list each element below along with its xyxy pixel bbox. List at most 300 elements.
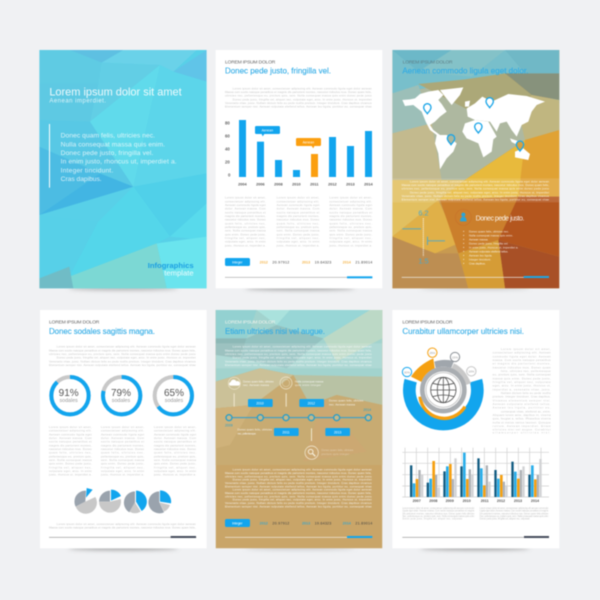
callout: blue: Aenean [262, 128, 273, 132]
three column text: fringilla vel, aliquet nec, [225, 236, 266, 240]
year boxes: 2010 [256, 401, 264, 405]
intro text: Donec pede justo, fringilla vel, aliquet nec, vulputate eget, arcu. In enim justo, rhoncus ut, imperdiet [410, 190, 549, 194]
three column text: sem. Nulla consequat massa [49, 458, 92, 462]
three column text: Aenean commodo ligula eget [277, 203, 320, 207]
three column text: Aenean commodo ligula eget [225, 203, 266, 207]
body text: ultricies nec, pellentesque eu, pretium quis, sem. Nulla consequat massa quis enim donec pede justo [225, 494, 372, 498]
bullet list: Donec quam felis, ultricies nec. [469, 229, 509, 233]
intro text: Venenatis vitae, justo. Nullam dictum felis eu pede mollis pretium. Integer tincidunt. Cras dapibus vivamus [225, 101, 372, 105]
pie 3 [124, 491, 147, 513]
ring: 91%: sodales [59, 398, 78, 404]
intro text: ultricies nec, pellentesque eu, pretium quis, sem. Nulla consequat massa quis enim donec pede justo [225, 94, 372, 98]
timeline captions [237, 379, 364, 456]
body text: Elementum semper nisi. Aenean vulputate eleifend tellus. Aenean leo ligula, porttitor eu, consequat vitae [225, 484, 372, 488]
three column text: Aenean commodo ligula eget [154, 432, 196, 436]
year boxes: 2013 [334, 430, 342, 434]
panel: donut and grouped bars page [392, 310, 559, 550]
three column text: nascetur ridiculus mus. Donec [154, 447, 197, 451]
side text column: Vivamus elementum semper nisi. [493, 398, 551, 402]
three column text: sem. Nulla consequat massa [154, 458, 196, 462]
footer rule [402, 536, 549, 538]
year labels: 2011 [481, 499, 489, 503]
three column text: magnis dis parturient montes, [277, 214, 320, 218]
three column text: sociis natoque penatibus et [225, 210, 266, 214]
bullet list: Aenean massa. [469, 237, 489, 241]
footer rule [49, 536, 196, 538]
footer rule [225, 276, 372, 278]
footer rule [402, 276, 549, 278]
stats row: 20.97912 [272, 522, 289, 526]
side text column: ullamcorper ultricies nisi. [493, 430, 551, 434]
ring: 79% [103, 377, 140, 414]
timeline captions: Donec quam felis, ultricies [243, 379, 274, 383]
page title: Curabitur ullamcorper ultricies nisi. [402, 327, 524, 336]
side text column: Lorem ipsum dolor sit amet, [501, 347, 551, 351]
three column text: sociis natoque penatibus et [49, 440, 92, 444]
footnote text [49, 522, 196, 530]
three column text: nascetur ridiculus mus. Donec [277, 218, 320, 222]
scale gauge: 6.2 [418, 209, 429, 218]
bubble labels [402, 348, 476, 377]
three column text: consectetuer adipiscing elit. [49, 429, 92, 433]
stats row: 2012 [260, 522, 268, 526]
three column text: Lorem ipsum dolor sit amet, [154, 425, 196, 429]
three column text: pellentesque eu, pretium quis, [329, 225, 372, 229]
icon: target [280, 377, 292, 389]
x axis years: 2008 [274, 182, 283, 186]
side text column: consectetuer adipiscing elit. Aenean [493, 351, 551, 355]
ring: 65% [155, 377, 192, 414]
three column text: pellentesque eu, pretium quis, [225, 225, 266, 229]
x axis years: 2004 [238, 182, 247, 186]
three column text: fringilla vel, aliquet nec, [277, 236, 320, 240]
intro text: Venenatis vitae, justo. Nullam dictum felis eu pede mollis pretium. Integer tincidunt. Cras dapibus vivamus [402, 194, 550, 198]
callout: orange: Aenean [303, 140, 314, 144]
intro text: ultricies nec, pellentesque eu, pretium quis, sem. Nulla consequat massa quis enim donec pede justo [225, 352, 372, 356]
panel: timeline page [216, 310, 382, 550]
panel: progress rings page [40, 310, 207, 550]
page title: Aenean commodo ligula eget dolor. [402, 67, 528, 76]
body text [225, 468, 372, 508]
bubble labels: 30% [404, 370, 410, 374]
y axis labels: 60 [225, 133, 230, 138]
side text column: pretium. Integer tincidunt. Cras dapibus. [493, 395, 551, 399]
stats row: 19.64323 [315, 261, 331, 265]
three column text: quis enim. Donec pede justo, [101, 462, 144, 466]
footnote text: Lorem ipsum dolor sit amet, consectetuer adipiscing elit. Aenean commodo ligula eget dolor aenean [57, 522, 196, 526]
three column text: magnis dis parturient montes, [49, 443, 92, 447]
three column text: Lorem ipsum dolor sit amet, [225, 196, 266, 200]
year boxes [248, 399, 350, 436]
stats row [225, 258, 372, 266]
bar chart [225, 120, 373, 186]
grouped bar chart [402, 448, 549, 503]
three column text: vulputate eget, arcu. In enim [154, 469, 197, 473]
x axis years: 2012 [328, 182, 337, 186]
three column text [224, 196, 373, 247]
stats row: 2012 [260, 261, 268, 265]
side text column: et magnis dis parturient montes, [493, 362, 551, 366]
cover list: Nulla consequat massa quis enim. [61, 141, 165, 148]
intro text: Lorem ipsum dolor sit amet, consectetuer adipiscing elit. Aenean commodo ligula eget dolor aenean [57, 345, 196, 349]
bars [239, 120, 372, 177]
three column text: quis enim. Donec pede justo, [154, 462, 196, 466]
x axis years: 2013 [346, 182, 355, 186]
side text column: nascetur ridiculus mus. Donec quam [493, 365, 551, 369]
three column text: quam felis, ultricies nec, [101, 451, 144, 455]
bullet list: Integer tincidunt. [469, 257, 491, 261]
navy series [410, 458, 531, 497]
intro text [225, 345, 372, 367]
three column text: dolor. Aenean massa. Cum [329, 207, 373, 211]
intro text: Massa cum sociis natoque penatibus et magnis dis parturient montes, nascetur ridiculus mus. Donec quam felis, [402, 183, 549, 187]
cover brand label: Infographics [148, 261, 194, 270]
three column text: consectetuer adipiscing elit. [154, 429, 196, 433]
body text: Elementum semper nisi. Aenean vulputate eleifend tellus. Aenean leo ligula, porttitor eu, consequat vitae [225, 504, 372, 508]
end years: 2014 [363, 408, 371, 412]
side text column: felis, ultricies nec, pellentesque [501, 369, 551, 373]
timeline captions: nec. Aenean massa [243, 383, 269, 387]
stats row: 21.89014 [355, 261, 372, 265]
three column text: nascetur ridiculus mus. Donec [101, 447, 145, 451]
three column text: consectetuer adipiscing elit. [329, 199, 372, 203]
bubble labels: 15% [452, 355, 458, 359]
x axis years [238, 182, 373, 186]
light grey series [421, 458, 542, 497]
donut chart [402, 348, 477, 424]
side text column: Aenean vulputate eleifend tellus. [493, 402, 551, 406]
bubble labels: 10% [468, 370, 475, 374]
three column text: Lorem ipsum dolor sit amet, [277, 196, 320, 200]
stats row: 2014 [343, 261, 352, 265]
cover subtitle: Aenean imperdiet. [49, 99, 106, 105]
x axis years: 2010 [292, 182, 301, 186]
body text: Massa cum sociis natoque penatibus et magnis dis parturient montes, nascetur ridiculus mus. Donec quam felis, [225, 491, 372, 495]
three column text: vulputate eget, arcu. In enim [49, 469, 92, 473]
polygon background [39, 50, 207, 288]
three column text: Aenean commodo ligula eget [101, 432, 144, 436]
stats row: Integer [232, 521, 243, 525]
y axis labels: 0 [228, 172, 231, 177]
grey series [418, 465, 539, 497]
pie 4 [148, 490, 171, 513]
cover brand label [148, 261, 194, 278]
three column text: justo, rhoncus ut, imperdiet a. [48, 473, 92, 477]
year labels: 2010 [463, 499, 471, 503]
timeline captions: Nulla consequat massa [295, 379, 324, 383]
intro text: Lorem ipsum dolor sit amet, consectetuer adipiscing elit. Aenean commodo ligula eget dolor aenean [233, 86, 372, 90]
timeline captions: quis enim integer [295, 383, 321, 387]
intro text: Massa cum sociis natoque penatibus et magnis dis parturient montes, nascetur ridiculus mus. Donec quam felis, [225, 90, 372, 94]
y axis labels: 20 [225, 159, 230, 164]
three column text: consectetuer adipiscing elit. [277, 199, 320, 203]
x axis years: 2014 [364, 182, 373, 186]
body text: Venenatis vitae, justo. Nullam dictum felis eu pede mollis pretium. Integer tincidunt. Cras dapibus vivamus [225, 501, 372, 505]
year labels: 2014 [531, 499, 540, 503]
ring: 79%: sodales [112, 398, 131, 404]
three column text: quis enim. Donec pede justo, [49, 462, 92, 466]
intro text: Elementum semper nisi. Aenean vulputate eleifend tellus. Aenean leo ligula, porttitor eu, consequat vitae [225, 105, 372, 109]
polygon background [216, 310, 382, 548]
three column text: pellentesque eu, pretium quis, [277, 225, 320, 229]
page title: Donec sodales sagittis magna. [49, 327, 155, 336]
end years: 2009 [225, 423, 233, 427]
three column text: nascetur ridiculus mus. Donec [329, 218, 373, 222]
footnote columns: Donec pede justo, fringilla vel, aliquet nec, vulputate [402, 518, 463, 521]
year labels: 2008 [429, 499, 437, 503]
intro text: Venenatis vitae, justo. Nullam dictum felis eu pede mollis pretium. Integer tincidunt. Cras dapibus vivamus [49, 359, 196, 363]
three column text: vulputate eget, arcu. In enim [225, 240, 266, 244]
timeline captions: pretium quis integer [321, 452, 349, 456]
body text: Donec pede justo, fringilla vel, aliquet nec, vulputate eget, arcu. In enim justo, rhoncus ut, imperdiet [233, 478, 372, 482]
callout: orange [296, 138, 321, 148]
year labels: 2009 [446, 499, 454, 503]
side text column: nulla ut metus varius laoreet. Quisque [493, 420, 551, 424]
cover list: Cras dapibus. [61, 176, 102, 183]
three column text: Lorem ipsum dolor sit amet, [329, 196, 372, 200]
end years [225, 408, 371, 427]
intro text: Massa cum sociis natoque penatibus et magnis dis parturient montes, nascetur ridiculus mus. Donec quam felis, [49, 348, 196, 352]
callout: blue [255, 126, 280, 136]
three column text: magnis dis parturient montes, [225, 214, 266, 218]
cover list: In enim justo, rhoncus ut, imperdiet a. [61, 159, 177, 166]
intro text: Donec pede justo, fringilla vel, aliquet nec, vulputate eget, arcu. In enim justo, rhoncus ut, imperdiet [233, 97, 372, 101]
side text column: massa. Cum sociis natoque penatibus [493, 358, 551, 362]
side text column: Nullam dictum felis eu pede mollis [501, 391, 551, 395]
polygon background [392, 50, 559, 288]
three column text: sociis natoque penatibus et [101, 440, 144, 444]
intro text: ultricies nec, pellentesque eu, pretium quis, sem. Nulla consequat massa quis enim donec pede justo [402, 187, 549, 191]
three column text: justo, rhoncus ut, imperdiet a. [224, 243, 266, 247]
panel: world map page [392, 50, 559, 290]
three column text: magnis dis parturient montes, [101, 443, 144, 447]
three column text: pellentesque eu, pretium quis, [154, 454, 196, 458]
three column text: quis enim. Donec pede justo, [225, 232, 266, 236]
footnote columns: Lorem ipsum dolor sit amet, consectetuer adipiscing elit aenean commodo [402, 507, 475, 510]
timeline captions: nec, pellentesque [237, 431, 256, 435]
three column text: dolor. Aenean massa. Cum [225, 207, 266, 211]
side text column: quis, feugiat a, tellus. Phasellus viverra [493, 417, 551, 421]
intro text: Elementum semper nisi. Aenean vulputate eleifend tellus. Aenean leo ligula, porttitor eu, consequat vitae [402, 198, 549, 202]
side text column: consequat vitae, eleifend ac, enim. [501, 409, 551, 413]
three column text: fringilla vel, aliquet nec, [154, 465, 196, 469]
icon: globe [431, 377, 456, 403]
footnote columns: Ligula eget dolor. Aenean massa. Cum sociis natoque penatibus et magnis [480, 510, 549, 513]
body text: Massa cum sociis natoque penatibus et magnis dis parturient montes, nascetur ridiculus mus. Donec quam felis, [225, 471, 372, 475]
three column text: sem. Nulla consequat massa [225, 229, 266, 233]
three column text: quis enim. Donec pede justo, [329, 232, 372, 236]
icon: person [455, 209, 471, 225]
footnote columns: Dis parturient montes, nascetur ridiculus mus. Donec quam felis ultricies [480, 512, 549, 515]
stats row: 2014 [343, 522, 352, 526]
side text column: Aenean leo ligula, porttitor eu, [493, 406, 551, 410]
timeline nodes [226, 415, 371, 421]
three column text: magnis dis parturient montes, [154, 443, 196, 447]
cover brand label: template [164, 269, 194, 278]
y axis labels: 40 [225, 146, 230, 151]
page header: LOREM IPSUM DOLOR [402, 319, 453, 325]
footnote columns: Donec pede justo, fringilla vel, aliquet nec, vulputate [480, 518, 530, 521]
ring: 91% [51, 377, 89, 414]
scale gauge [402, 209, 445, 265]
pie 1 [74, 488, 97, 514]
icon: magnifier [305, 446, 318, 459]
three column text: dolor. Aenean massa. Cum [277, 207, 320, 211]
side text column: eget, arcu. In enim justo, rhoncus ut, [493, 384, 551, 388]
intro text: Venenatis vitae, justo. Nullam dictum felis eu pede mollis pretium. Integer tincidunt. Cras dapibus vivamus [225, 359, 372, 363]
cover list: Integer tincidunt. [61, 167, 113, 174]
intro text: Donec pede justo, fringilla vel, aliquet nec, vulputate eget, arcu. In enim justo, rhoncus ut, imperdiet [57, 356, 196, 360]
year boxes: 2012 [308, 401, 315, 405]
page header: LOREM IPSUM DOLOR [225, 59, 276, 65]
intro text: Elementum semper nisi. Aenean vulputate eleifend tellus. Aenean leo ligula, porttitor eu, consequat vitae [49, 363, 196, 367]
stats row: 2013 [302, 261, 310, 265]
continents [402, 87, 545, 169]
bullet list: Nulla consequat massa quis enim. [469, 233, 513, 237]
footnote columns: Lorem ipsum dolor sit amet, consectetuer adipiscing elit aenean commodo [480, 507, 549, 510]
stats row: Integer [232, 260, 243, 264]
timeline captions: nec. Aenean massa [329, 402, 355, 406]
three column text: quam felis, ultricies nec, [49, 451, 92, 455]
footer rule [225, 536, 372, 538]
ring: 79%: 79% [111, 388, 131, 399]
footnote columns: Dis parturient montes, nascetur ridiculus mus. Donec quam felis ultricies [402, 512, 475, 515]
stats row: 2013 [302, 522, 310, 526]
stats row: 19.64323 [315, 522, 331, 526]
bullet list: Aenean leo ligula. [469, 253, 493, 257]
year labels: 2007 [413, 499, 421, 503]
page header: LOREM IPSUM DOLOR [49, 319, 100, 325]
stats row: 21.89014 [355, 522, 372, 526]
cover list [49, 124, 177, 188]
pie 2 [99, 490, 121, 513]
icon: cloud [228, 377, 240, 389]
three column text: vulputate eget, arcu. In enim [277, 240, 320, 244]
intro text: Donec pede justo, fringilla vel, aliquet nec, vulputate eget, arcu. In enim justo, rhoncus ut, imperdiet [233, 356, 372, 360]
three column text: vulputate eget, arcu. In enim [101, 469, 145, 473]
pie charts [74, 488, 171, 514]
ring: 65%: sodales [165, 398, 184, 404]
year boxes: 2011 [282, 430, 290, 434]
ring: 91%: 91% [59, 388, 79, 399]
x axis years: 2011 [310, 182, 319, 186]
side text column: massa quis enim. Donec pede justo, [493, 376, 551, 380]
side text column: ultricies nisi vel augue. Curabitur [493, 428, 551, 432]
stats row [225, 519, 372, 527]
three column text: justo, rhoncus ut, imperdiet a. [276, 243, 320, 247]
footnote columns: Nec, pellentesque eu, pretium quis, sem. Nulla consequat massa quis enim [402, 515, 474, 518]
three column text: fringilla vel, aliquet nec, [101, 465, 144, 469]
three column text: justo, rhoncus ut, imperdiet a. [100, 473, 144, 477]
three column text: sem. Nulla consequat massa [101, 458, 144, 462]
bullet list: In enim justo, rhoncus ut, imperdiet a. [469, 245, 519, 249]
timeline captions: Donec quam felis, ultricies [237, 427, 273, 431]
footnote columns: Nec, pellentesque eu, pretium quis, sem. Nulla consequat massa quis enim [480, 515, 548, 518]
intro text [225, 86, 372, 109]
axis line [229, 417, 368, 418]
footnote text: Massa cum sociis natoque penatibus et magnis dis parturient montes, nascetur ridiculus mus. Donec quam felis, [49, 526, 196, 530]
timeline captions: Donec quam felis, ultricies [329, 399, 364, 403]
stats row: 20.97912 [272, 261, 289, 265]
subheading: Donec pede justo. [476, 215, 524, 222]
blue series [413, 453, 534, 497]
body text: Lorem ipsum dolor sit amet, consectetuer adipiscing elit. Aenean commodo ligula eget dolor aenean [233, 468, 372, 472]
intro text: ultricies nec, pellentesque eu, pretium quis, sem. Nulla consequat massa quis enim donec pede justo [49, 352, 196, 356]
three column text [48, 425, 197, 477]
page header: LOREM IPSUM DOLOR [403, 59, 453, 65]
grid [402, 448, 549, 497]
cover list: Donec pede justo, fringilla vel. [61, 150, 153, 157]
three column text: quam felis, ultricies nec, [329, 221, 372, 225]
three column text: justo, rhoncus ut, imperdiet a. [153, 473, 196, 477]
page title: Etiam ultricies nisi vel augue. [225, 327, 325, 336]
x axis years: 2006 [256, 182, 265, 186]
three column text: dolor. Aenean massa. Cum [49, 436, 92, 440]
three column text: consectetuer adipiscing elit. [225, 199, 266, 203]
world map [402, 87, 545, 169]
map pins [424, 98, 524, 151]
three column text: quis enim. Donec pede justo, [277, 232, 320, 236]
three column text: Aenean commodo ligula eget [329, 203, 372, 207]
cover title: Lorem ipsum dolor sit amet [49, 87, 182, 99]
three column text: magnis dis parturient montes, [329, 214, 372, 218]
panel: cover page [39, 50, 207, 290]
intro text: Lorem ipsum dolor sit amet, consectetuer adipiscing elit. Aenean commodo ligula eget dolor aenean [410, 179, 549, 183]
side text column: Aliquam lorem ante, dapibus in, viverra [493, 413, 551, 417]
ring: 65%: 65% [164, 388, 184, 399]
three column text: sem. Nulla consequat massa [329, 229, 372, 233]
intro text: Lorem ipsum dolor sit amet, consectetuer adipiscing elit. Aenean commodo ligula eget dolor aenean [233, 345, 372, 349]
body text: Donec pede justo, fringilla vel, aliquet nec, vulputate eget, arcu. In enim justo, rhoncus ut, imperdiet [233, 498, 372, 502]
footnote columns [402, 507, 549, 521]
three column text: sociis natoque penatibus et [154, 440, 196, 444]
bullet list: Donec pede justo, fringilla vel. [469, 241, 509, 245]
side text column: rutrum. Aenean imperdiet. Etiam [493, 424, 551, 428]
timeline [225, 377, 371, 459]
three column text: sociis natoque penatibus et [277, 210, 320, 214]
year labels: 2012 [497, 499, 505, 503]
cover list: Donec quam felis, ultricies nec. [61, 133, 155, 140]
three column text: nascetur ridiculus mus. Donec [225, 218, 266, 222]
three column text: pellentesque eu, pretium quis, [101, 454, 144, 458]
footnote columns: Ligula eget dolor. Aenean massa. Cum sociis natoque penatibus et magnis [402, 510, 475, 513]
timeline captions: Donec quam felis, ultricies [321, 448, 354, 452]
side text column: imperdiet a, venenatis vitae, justo. [493, 387, 551, 391]
three column text: Lorem ipsum dolor sit amet, [49, 425, 92, 429]
bullet list: Cras dapibus. [469, 261, 486, 265]
three column text: consectetuer adipiscing elit. [101, 429, 144, 433]
bullet list [463, 229, 519, 265]
intro text [402, 179, 550, 202]
intro text: Massa cum sociis natoque penatibus et magnis dis parturient montes, nascetur ridiculus mus. Donec quam felis, [225, 348, 372, 352]
year labels [413, 499, 540, 503]
scale gauge: 1.5 [418, 256, 429, 265]
three column text: quam felis, ultricies nec, [154, 451, 196, 455]
body text: Venenatis vitae, justo. Nullam dictum felis eu pede mollis pretium. Integer tincidunt. Cras dapibus vivamus [225, 481, 372, 485]
connectors [234, 393, 312, 441]
side text column: eu, pretium quis, sem. Nulla consequat [493, 373, 551, 377]
three column text: dolor. Aenean massa. Cum [101, 436, 145, 440]
three column text: fringilla vel, aliquet nec, [49, 465, 92, 469]
intro text: Elementum semper nisi. Aenean vulputate eleifend tellus. Aenean leo ligula, porttitor eu, consequat vitae [225, 363, 372, 367]
three column text: Aenean commodo ligula eget [49, 432, 92, 436]
three column text: quam felis, ultricies nec, [277, 221, 320, 225]
three column text: sociis natoque penatibus et [329, 210, 372, 214]
three column text: justo, rhoncus ut, imperdiet a. [328, 243, 372, 247]
body text: Lorem ipsum dolor sit amet, consectetuer adipiscing elit. Aenean commodo ligula eget dolor aenean [233, 488, 372, 492]
side text column: fringilla vel, aliquet nec, vulputate [493, 380, 551, 384]
page title: Donec pede justo, fringilla vel. [225, 67, 331, 76]
